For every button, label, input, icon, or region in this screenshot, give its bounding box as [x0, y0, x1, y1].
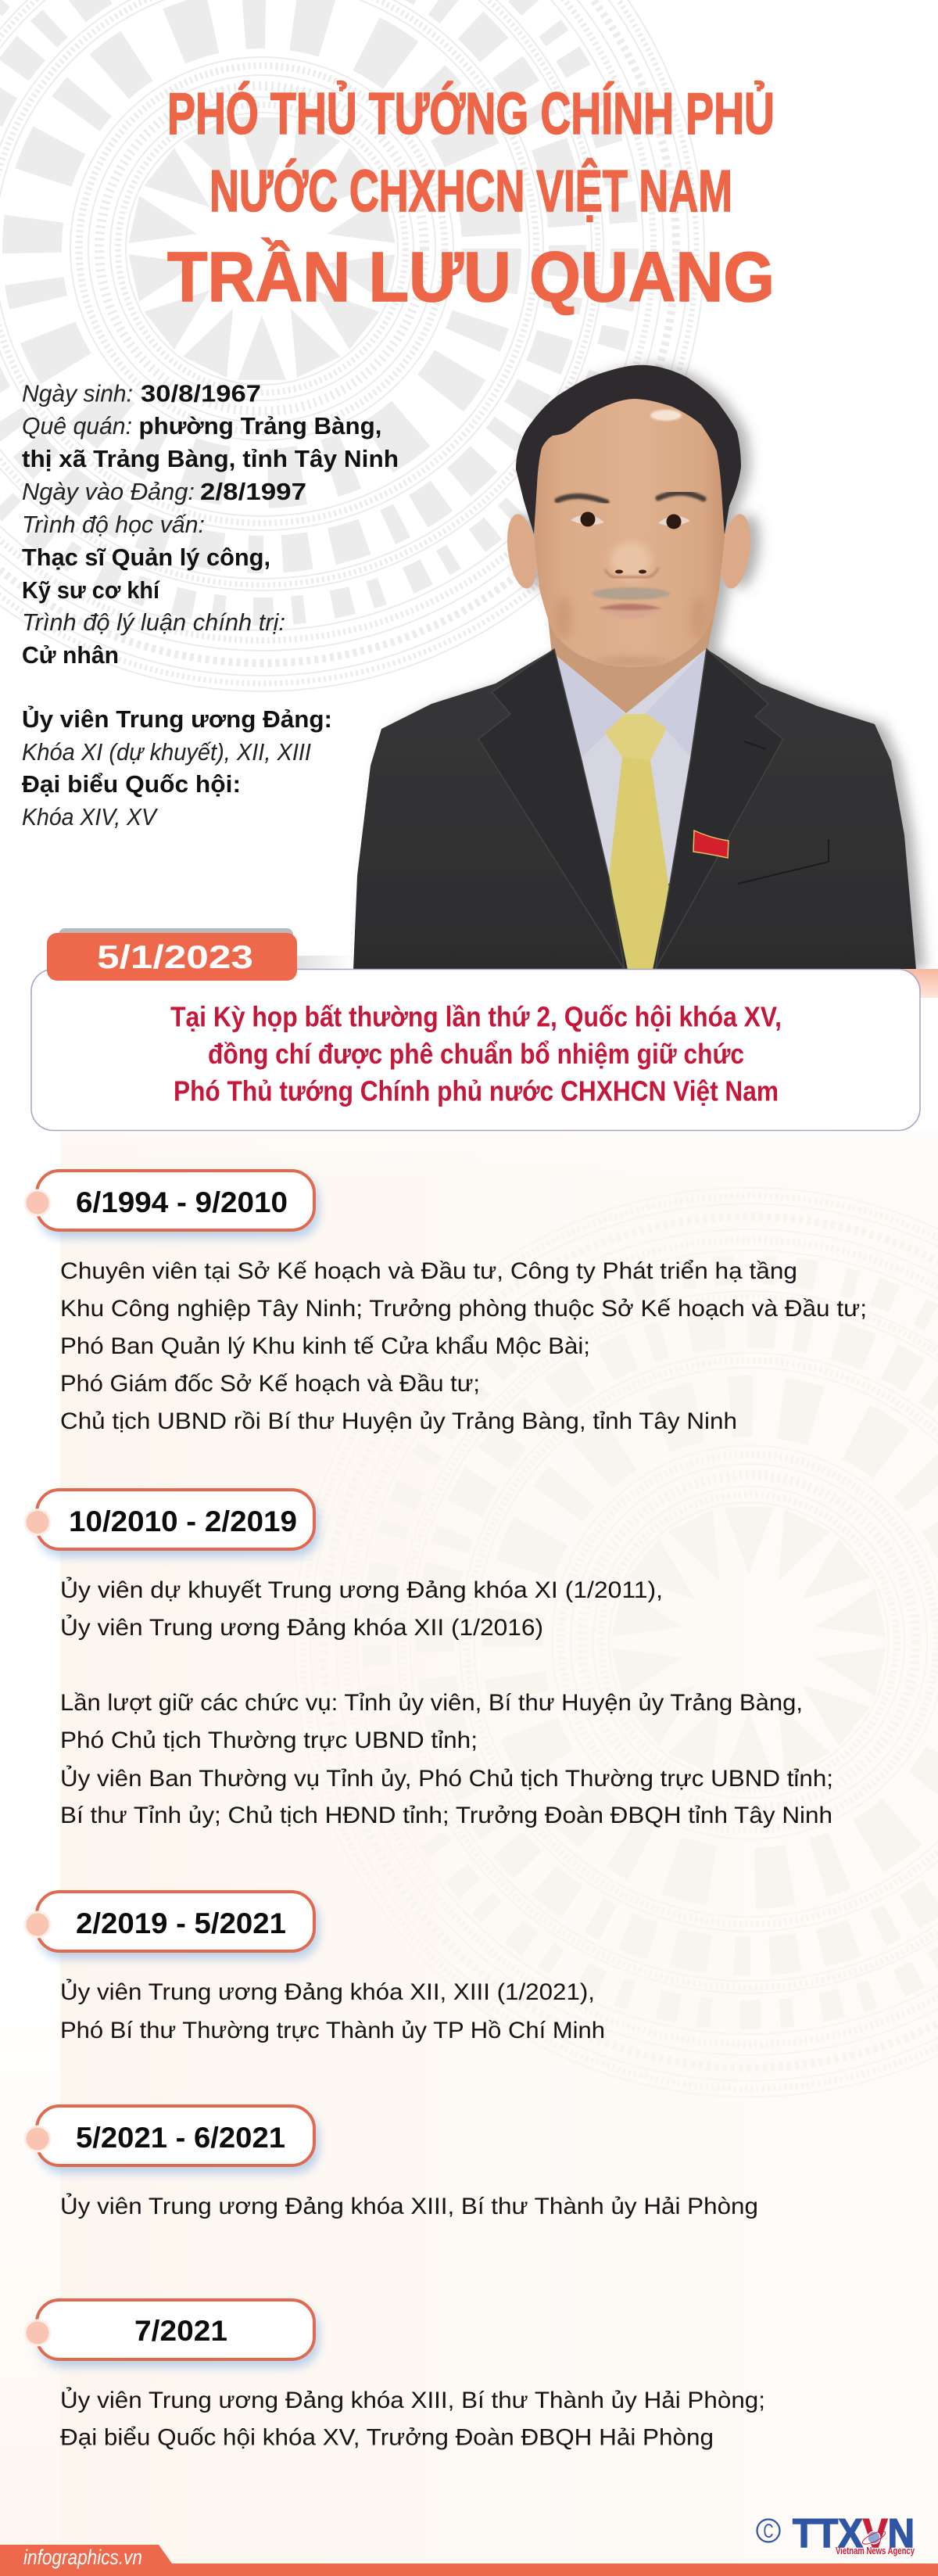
home town: thị xã Trảng Bàng, tỉnh Tây Ninh — [22, 445, 399, 472]
portrait photo — [353, 365, 916, 970]
date badge: 5/1/2023 — [97, 938, 253, 975]
eyes — [571, 511, 690, 529]
party join date: Ngày vào Đảng: — [22, 478, 195, 505]
face — [534, 399, 725, 667]
date pill: 2/2019 - 5/2021 — [76, 1907, 286, 1939]
national assembly: Khóa XIV, XV — [22, 803, 159, 831]
period text: Phó Chủ tịch Thường trực UBND tỉnh; — [60, 1727, 478, 1753]
period text — [60, 1979, 605, 2043]
date pill: 7/2021 — [134, 2315, 227, 2347]
forehead highlight — [650, 410, 682, 421]
birth date: Ngày sinh: — [22, 380, 133, 407]
date pill: 5/2021 - 6/2021 — [76, 2122, 285, 2154]
panel box — [31, 970, 920, 1131]
lapel buttonhole and breast pocket — [738, 741, 829, 884]
period text: Ủy viên dự khuyết Trung ương Đảng khóa XI (1/2011), — [60, 1577, 663, 1603]
period text: Phó Giám đốc Sở Kế hoạch và Đầu tư; — [60, 1371, 480, 1397]
period text: Phó Ban Quản lý Khu kinh tế Cửa khẩu Mộc Bài; — [60, 1333, 590, 1359]
education — [22, 511, 270, 604]
period text: Ủy viên Trung ương Đảng khóa XIII, Bí thư Thành ủy Hải Phòng — [60, 2193, 758, 2219]
icon: copyright — [757, 2520, 780, 2542]
appointment text: Tại Kỳ họp bất thường lần thứ 2, Quốc hội khóa XV, — [170, 1001, 782, 1032]
period text — [60, 1577, 833, 1828]
period text: Chuyên viên tại Sở Kế hoạch và Đầu tư, Công ty Phát triển hạ tầng — [60, 1258, 797, 1284]
mouth — [598, 604, 662, 619]
text block: personal details — [22, 380, 399, 831]
shirt — [555, 649, 706, 884]
political theory — [22, 608, 285, 669]
site name: infographics.vn — [23, 2546, 142, 2569]
home town: phường Trảng Bàng, — [139, 412, 381, 439]
date pill: 6/1994 - 9/2010 — [76, 1186, 288, 1218]
background: lower bronze drum pattern — [295, 1188, 938, 2097]
badge shadow strip — [59, 928, 353, 970]
period 3: 2/2019 - 5/2021 — [25, 1892, 605, 2043]
party flag pin — [693, 831, 729, 858]
footer bar with site tab — [0, 2545, 938, 2576]
neck — [547, 610, 715, 715]
date badge — [47, 933, 297, 981]
period text: Lần lượt giữ các chức vụ: Tỉnh ủy viên, Bí thư Huyện ủy Trảng Bàng, — [60, 1690, 803, 1716]
education: Trình độ học vấn: — [22, 511, 205, 538]
date pill — [25, 1490, 314, 1549]
period text — [60, 2387, 765, 2451]
title line 2: NƯỚC CHXHCN VIỆT NAM — [209, 158, 732, 224]
appointment text — [170, 1001, 782, 1107]
appointment text: Phó Thủ tướng Chính phủ nước CHXHCN Việt Nam — [174, 1075, 779, 1107]
period text: Khu Công nghiệp Tây Ninh; Trưởng phòng thuộc Sở Kế hoạch và Đầu tư; — [60, 1296, 867, 1322]
central committee: Ủy viên Trung ương Đảng: — [22, 705, 332, 733]
birth date: 30/8/1967 — [141, 380, 261, 407]
date pill — [25, 1892, 314, 1951]
suit jacket — [353, 649, 916, 970]
moustache shadow — [592, 587, 670, 600]
political theory: Cử nhân — [22, 641, 119, 669]
title name: TRẦN LƯU QUANG — [167, 237, 775, 317]
face shading — [553, 542, 709, 666]
period 2: 10/2010 - 2/2019 — [25, 1490, 833, 1828]
central committee — [22, 705, 332, 766]
agency tagline: Vietnam News Agency — [836, 2546, 915, 2556]
party join date: 2/8/1997 — [200, 478, 306, 505]
period text: Bí thư Tỉnh ủy; Chủ tịch HĐND tỉnh; Trưởng Đoàn ĐBQH tỉnh Tây Ninh — [60, 1803, 832, 1828]
period text: Phó Bí thư Thường trực Thành ủy TP Hồ Chí Minh — [60, 2018, 605, 2043]
political theory: Trình độ lý luận chính trị: — [22, 608, 285, 636]
period text: Chủ tịch UBND rồi Bí thư Huyện ủy Trảng Bàng, tỉnh Tây Ninh — [60, 1408, 737, 1434]
period text: Ủy viên Trung ương Đảng khóa XII (1/2016) — [60, 1614, 543, 1641]
period 4: 5/2021 - 6/2021 — [25, 2106, 758, 2219]
party join date — [22, 478, 306, 505]
home town: Quê quán: — [22, 412, 132, 439]
period text: Ủy viên Trung ương Đảng khóa XII, XIII (1/2021), — [60, 1979, 595, 2005]
tie — [605, 714, 669, 970]
period 1: 6/1994 - 9/2010 — [25, 1171, 867, 1434]
central committee: Khóa XI (dự khuyết), XII, XIII — [22, 738, 311, 766]
appointment text: đồng chí được phê chuẩn bổ nhiệm giữ chức — [208, 1038, 744, 1070]
nose — [605, 568, 658, 577]
background: peach page tint — [0, 1130, 938, 2563]
eyebrows — [557, 493, 704, 502]
panel: appointment 5/1/2023 — [31, 933, 920, 1131]
peach corner behind panel — [899, 969, 938, 998]
icon: globe — [861, 2529, 887, 2546]
background: top bronze drum pattern — [0, 0, 704, 691]
date pill — [25, 2106, 314, 2165]
date pill — [25, 2300, 314, 2359]
national assembly: Đại biểu Quốc hội: — [22, 770, 241, 798]
period text: Đại biểu Quốc hội khóa XV, Trưởng Đoàn ĐBQH Hải Phòng — [60, 2424, 714, 2451]
lapels — [478, 649, 783, 970]
date pill — [25, 1171, 314, 1230]
home town — [22, 412, 399, 472]
logo: TTXVN copyright — [757, 2511, 915, 2556]
national assembly — [22, 770, 241, 831]
period text: Ủy viên Ban Thường vụ Tỉnh ủy, Phó Chủ tịch Thường trực UBND tỉnh; — [60, 1765, 833, 1792]
title — [167, 81, 775, 317]
ears — [503, 512, 755, 590]
birth date — [22, 380, 261, 407]
period text: Ủy viên Trung ương Đảng khóa XIII, Bí thư Thành ủy Hải Phòng; — [60, 2387, 765, 2413]
date pill: 10/2010 - 2/2019 — [69, 1505, 297, 1537]
period 5: 7/2021 — [25, 2300, 765, 2451]
period text — [60, 1258, 867, 1434]
education: Kỹ sư cơ khí — [22, 576, 160, 604]
education: Thạc sĩ Quản lý công, — [22, 544, 270, 571]
icon: copyright: C — [763, 2520, 774, 2542]
hair back — [516, 365, 741, 534]
agency wordmark: TTXVN — [793, 2511, 915, 2556]
collar — [555, 649, 706, 757]
